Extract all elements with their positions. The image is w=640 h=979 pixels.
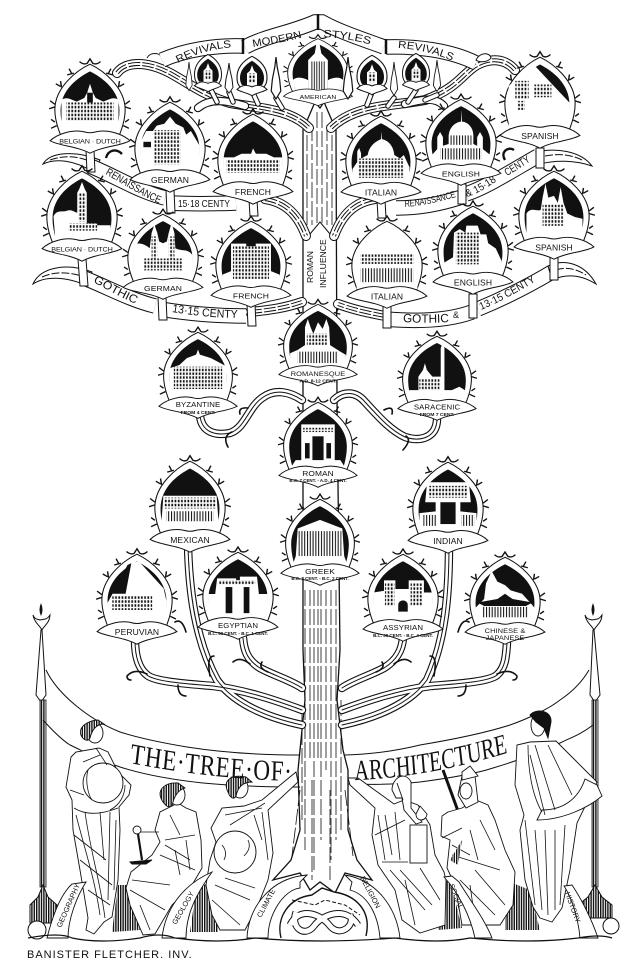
bottom ribbons [47,872,598,938]
medallion: greek: B.C. 8 CENT. - B.C. 2 CENT. [291,576,349,581]
label: revivals: REVIVALS [176,40,231,63]
ribbon: gothic right [392,262,598,328]
medallion: belgian dutch gothic [41,166,123,261]
medallion: belgian dutch gothic: BELGIAN · DUTCH [51,246,113,253]
credit: BANISTER FLETCHER. INV. [27,949,193,961]
medallion: belgian dutch renaissance [49,59,131,153]
medallion: american: AMERICAN [300,94,337,101]
medallion: french renaissance [212,109,294,204]
medallion: saracenic [397,331,477,420]
medallion: english gothic: ENGLISH [454,279,492,287]
label: gothic: GOTHIC [404,314,448,323]
medallion: spanish gothic: SPANISH [535,244,573,252]
title text [132,734,507,780]
medallion: egyptian [197,547,279,639]
medallion: italian gothic [346,216,428,308]
medallion: belgian dutch renaissance: BELGIAN · DUTCH [59,139,121,145]
medallion: saracenic: SARACENIC [414,403,461,411]
ribbon: renaissance right [396,148,594,216]
medallion: greek [280,494,360,585]
medallion: mexican [149,456,231,552]
spires [186,57,441,99]
medallion: greek: GREEK [305,567,335,576]
label: gothic: GOTHIC [94,276,138,303]
hangers between leaves and ribbons [78,148,558,328]
medallion: indian [407,457,489,553]
label: centy right: CENTY [504,155,529,175]
medallion: egyptian: EGYPTIAN [218,621,258,630]
tree roots knot [280,888,367,938]
medallion: italian renaissance: ITALIAN [365,189,397,197]
small medallion: revival 2 [237,56,267,96]
label: 15-18 cent left: 15·18 CENTY [178,200,230,207]
title banner [43,670,593,787]
label: revivals right: REVIVALS [398,40,454,60]
figure: social [441,766,515,925]
label: 13-15 cent left: 13·15 CENTY [172,304,238,318]
medallion: spanish renaissance: SPANISH [521,131,559,141]
medallion: spanish renaissance [499,52,581,148]
medallion: italian gothic: ITALIAN [371,293,403,301]
medallion: peruvian [96,549,178,644]
ribbon: modern styles revivals [146,14,492,70]
medallion: french gothic [210,216,292,307]
ribbon: renaissance left [42,149,236,212]
figure: climate [206,772,298,930]
medallion: chinese japanese: CHINESE & [485,627,526,635]
ribbon: religion: RELIGION [358,875,383,910]
medallion: byzantine [158,327,238,418]
medallion: french renaissance: FRENCH [235,187,271,197]
ribbon: history: HISTORY [563,891,583,924]
label: modern: MODERN [252,30,302,47]
branches [117,60,517,725]
tree trunk [273,102,372,893]
medallion: english gothic [432,201,514,294]
ribbon: social [444,876,492,938]
title text: ARCHITECTURE [354,734,507,780]
small medallion: revival 4 [402,53,430,91]
ribbon: gothic left [32,266,246,324]
ribbon: social: SOCIAL [447,882,466,911]
small medallion: revival 1 [194,54,222,92]
medallion: mexican: MEXICAN [170,535,210,545]
figure: geography [66,720,131,934]
ribbon: geology: GEOLOGY [170,890,196,926]
title text: THE·TREE·OF· [132,744,290,780]
label: renaissance: RENAISSANCE [106,168,162,204]
medallion: indian: INDIAN [433,536,463,546]
medallion: peruvian: PERUVIAN [115,627,159,637]
medallion: english renaissance [420,94,502,185]
right pole with lamp [578,603,619,934]
shading behind figures [112,880,540,932]
medallion: roman: ROMAN [302,470,334,478]
medallion: german gothic: GERMAN [144,284,182,293]
medallion: chinese japanese: JAPANESE [486,634,525,642]
ribbon: geography: GEOGRAPHY [55,882,82,929]
medallion: assyrian [362,549,444,641]
ribbon: geography [47,882,86,938]
figure: geology [126,783,202,935]
ribbon: climate: CLIMATE [255,887,277,919]
medallion: roman [278,397,358,487]
figure: religion [348,776,446,933]
medallion: english renaissance: ENGLISH [442,170,480,179]
medallion: egyptian: B.C. 50 CENT. - B.C. 1 CENT. [208,631,268,636]
medallion: italian renaissance [340,111,422,204]
medallion: romanesque: ROMANESQUE [291,371,346,378]
medallion: french gothic: FRENCH [233,292,269,301]
medallion: byzantine: FROM 4 CENT. [181,410,216,416]
ribbon: religion [345,875,400,938]
medallion: assyrian: ASSYRIAN [383,623,423,632]
medallion: romanesque [278,299,358,386]
medallion: chinese japanese [464,552,546,644]
label: renaissance: RENAISSANCE [405,190,456,207]
left pole with lamp [28,603,57,939]
medallion: german renaissance [129,97,211,192]
figure: history [515,711,602,922]
medallion: assyrian: B.C. 30 CENT. - B.C. 4 CENT. [373,633,433,638]
medallion: byzantine: BYZANTINE [176,400,220,409]
medallion: romanesque: A.D. 8-12 CENT. [299,379,337,384]
label: 15-18 right: & 15·18 [466,176,496,196]
medallion: saracenic: FROM 7 CENT. [420,412,454,418]
ribbon: climate [247,875,307,938]
medallion: german renaissance: GERMAN [151,175,189,185]
ground line [28,935,612,941]
ampersand: & [453,310,459,320]
medallion: american [283,35,353,106]
ribbon: history [563,885,598,938]
medallion: spanish gothic [513,166,595,259]
label: 13-15 cent right: 13·15 CENTY [480,276,534,310]
label: influence: INFLUENCE [318,239,328,288]
medallion: german gothic [122,209,204,299]
small medallion: revival 3 [357,55,387,95]
label: roman influence: ROMAN [305,251,315,283]
ribbon: geology [162,872,212,938]
label: styles: STYLES [324,30,371,44]
medallion: roman: B.C. 7 CENT. - A.D. 4 CENT. [289,478,347,483]
